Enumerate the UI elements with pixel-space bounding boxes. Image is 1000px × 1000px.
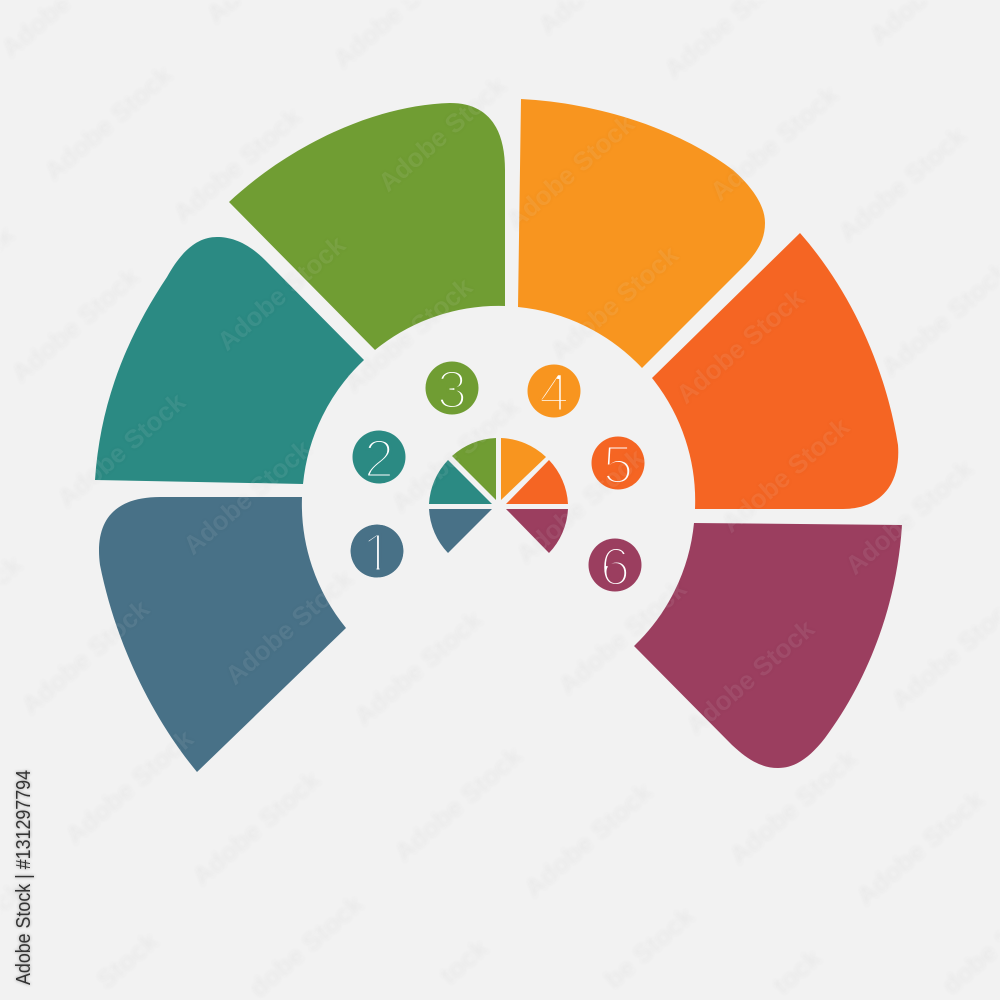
badge 6: 6	[600, 537, 630, 597]
pie wedge 6	[506, 509, 568, 553]
watermark pattern: tock	[434, 932, 494, 990]
badge 1: 1	[362, 523, 392, 583]
numbered badges	[350, 360, 644, 597]
watermark pattern: Adobe Stock	[670, 282, 810, 409]
side credit text: Adobe Stock | #131297794	[13, 770, 35, 985]
badge 5: 5	[603, 435, 633, 495]
segment 5: red-orange	[652, 233, 898, 509]
watermark pattern: Adobe Stock	[219, 563, 359, 690]
watermark pattern: Adobe Stock	[211, 229, 351, 356]
segment 2: teal	[95, 237, 364, 484]
pie wedge 2	[429, 460, 492, 504]
outer arch of six segments	[95, 99, 902, 772]
watermark pattern: Adobe Stock	[38, 59, 178, 186]
watermark pattern: Adobe Stock	[348, 604, 488, 731]
watermark pattern: Adobe Stock	[372, 70, 512, 197]
watermark pattern: Adobe Stock	[177, 433, 317, 560]
watermark pattern: tock	[767, 942, 827, 1000]
badge 3	[426, 360, 478, 420]
watermark pattern: Adobe Stock	[518, 776, 658, 903]
segment 3: green	[229, 103, 505, 350]
watermark pattern: Adobe Stock	[167, 101, 307, 228]
pie wedge 4	[501, 438, 546, 500]
watermark pattern: dobe Stock	[243, 888, 369, 1000]
watermark pattern: Adobe Stock	[510, 442, 650, 569]
watermark pattern: Adobe Stock	[839, 453, 979, 580]
watermark pattern: Adobe Stock	[704, 79, 844, 206]
badge 1	[350, 524, 404, 578]
watermark pattern: Adobe Stock	[850, 784, 990, 911]
segment 4: orange	[518, 99, 765, 368]
badge 3: 3	[437, 360, 467, 420]
watermark pattern: Adobe Stock	[723, 743, 863, 870]
badge 2	[352, 429, 406, 489]
watermark pattern: Adobe Stock	[832, 120, 972, 247]
segment 6: plum	[634, 523, 902, 768]
pie wedge 1	[429, 509, 492, 553]
small central pie	[429, 438, 568, 553]
watermark pattern: Adobe Stock	[15, 593, 155, 720]
watermark pattern: Stock	[91, 925, 164, 995]
watermark pattern: Adobe Stock	[186, 764, 326, 891]
watermark pattern: Adobe Stock	[544, 239, 684, 366]
badge 2: 2	[364, 429, 394, 489]
watermark pattern: Adobe Stock	[680, 613, 820, 740]
watermark pattern: Adobe Stock	[338, 271, 478, 398]
pie wedge 3	[452, 438, 496, 500]
badge 4: 4	[539, 363, 569, 423]
badge 5	[592, 435, 644, 495]
watermark pattern: Adobe Stock	[5, 261, 145, 388]
watermark pattern: Adobe Stock	[59, 723, 199, 850]
badge 4	[528, 363, 580, 423]
watermark pattern: Adobe Stock	[51, 386, 191, 513]
watermark pattern: Adobe Stock	[388, 740, 528, 867]
watermark pattern: be Stock	[598, 900, 700, 994]
badge 6	[588, 537, 642, 597]
watermark pattern: Adobe Stock	[715, 411, 855, 538]
pie wedge 5	[506, 460, 568, 504]
watermark pattern: Adobe Stock	[500, 108, 640, 235]
segment 1: slate blue	[99, 497, 346, 772]
watermark pattern: Adobe Stock	[385, 391, 525, 518]
watermark pattern: Adobe Stock	[552, 573, 692, 700]
